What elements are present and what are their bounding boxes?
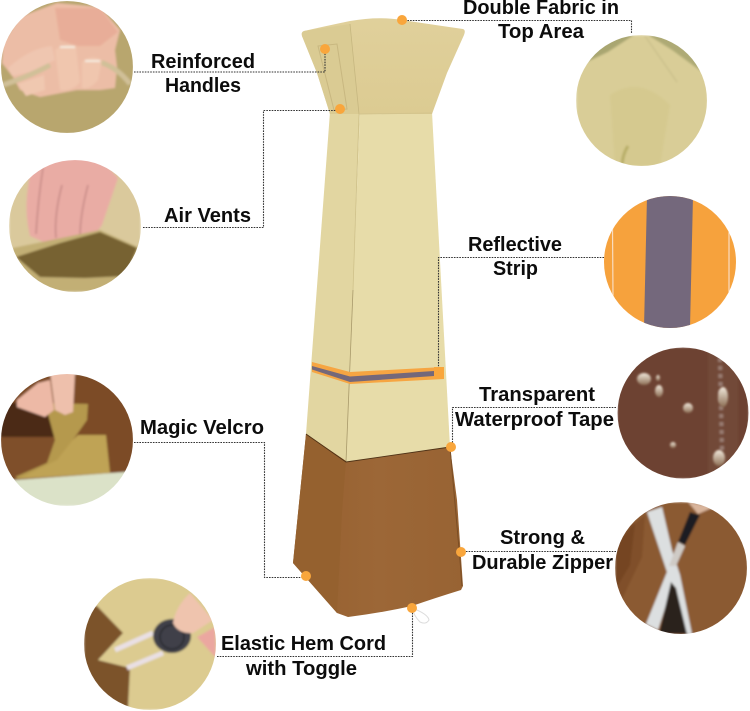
label: reinforced handles: Handles	[165, 75, 241, 97]
label: reinforced handles: Reinforced	[151, 51, 255, 73]
callout line: zipper	[461, 550, 616, 552]
zipper opening	[659, 582, 687, 634]
photo: air vents	[0, 158, 141, 292]
label: reflective strip: Reflective	[468, 234, 562, 256]
photo: reflective strip	[604, 196, 736, 328]
photo: magic velcro	[0, 372, 134, 506]
fingers	[10, 48, 54, 75]
cover main upper body, right face	[346, 112, 450, 462]
photo: zipper	[615, 502, 748, 635]
label: air vents: Air Vents	[164, 205, 251, 227]
label: double fabric in top area: Top Area	[498, 21, 585, 43]
flare left face	[302, 24, 359, 114]
reflective strip orange	[312, 362, 444, 384]
label: strong and durable zipper: Durable Zipper	[472, 552, 613, 574]
callout line: transparent tape	[452, 408, 616, 447]
hand	[2, 3, 120, 97]
cover top flare	[302, 18, 465, 114]
body seam	[350, 24, 359, 114]
callout line: reinforced handles	[134, 49, 325, 72]
callout line: elastic cord	[217, 608, 412, 656]
zipper tape	[646, 507, 692, 634]
label: reflective strip: Strip	[493, 258, 538, 280]
toggle	[153, 619, 191, 653]
handle stitching	[318, 44, 347, 110]
brown lower section	[293, 434, 463, 617]
cord	[3, 62, 130, 85]
photo: reinforced handles	[0, 0, 134, 134]
peeled flap	[15, 403, 88, 478]
product: patio heater cover	[293, 18, 465, 623]
zipper seam	[450, 447, 462, 586]
photo: double fabric	[570, 35, 708, 168]
skin tip	[688, 502, 714, 514]
cover main upper body, left face	[306, 112, 360, 462]
hem cord loop	[412, 608, 429, 623]
callout line: reflective strip	[438, 258, 604, 372]
hand	[26, 158, 118, 244]
brown section left face	[293, 434, 346, 613]
brown corners	[84, 606, 130, 708]
pull tab	[678, 512, 700, 545]
pale background	[13, 470, 126, 506]
callout line: air vents	[143, 110, 340, 228]
lower velcro flap	[15, 435, 110, 479]
marker dots	[301, 15, 466, 613]
label: elastic hem cord with toggle: with Toggle	[245, 658, 357, 680]
reflective strip grey	[312, 366, 434, 382]
cords	[115, 633, 163, 668]
thumb	[173, 593, 213, 633]
hem edge line	[306, 434, 450, 462]
fabric lower	[13, 230, 138, 292]
label: transparent waterproof tape: Transparent	[479, 384, 595, 406]
callout line: double fabric	[402, 20, 632, 34]
photo: waterproof tape	[617, 347, 749, 479]
label: elastic hem cord with toggle: Elastic Hem Cord	[221, 633, 386, 655]
fingers	[50, 372, 75, 415]
water drops	[637, 373, 728, 466]
photo: elastic hem cord with toggle	[84, 578, 217, 710]
label: strong and durable zipper: Strong &	[500, 527, 585, 549]
label: transparent waterproof tape: Waterproof Tape	[455, 409, 614, 431]
callout line: magic velcro	[134, 442, 306, 578]
label: magic velcro: Magic Velcro	[140, 417, 264, 439]
mesh	[16, 232, 137, 278]
